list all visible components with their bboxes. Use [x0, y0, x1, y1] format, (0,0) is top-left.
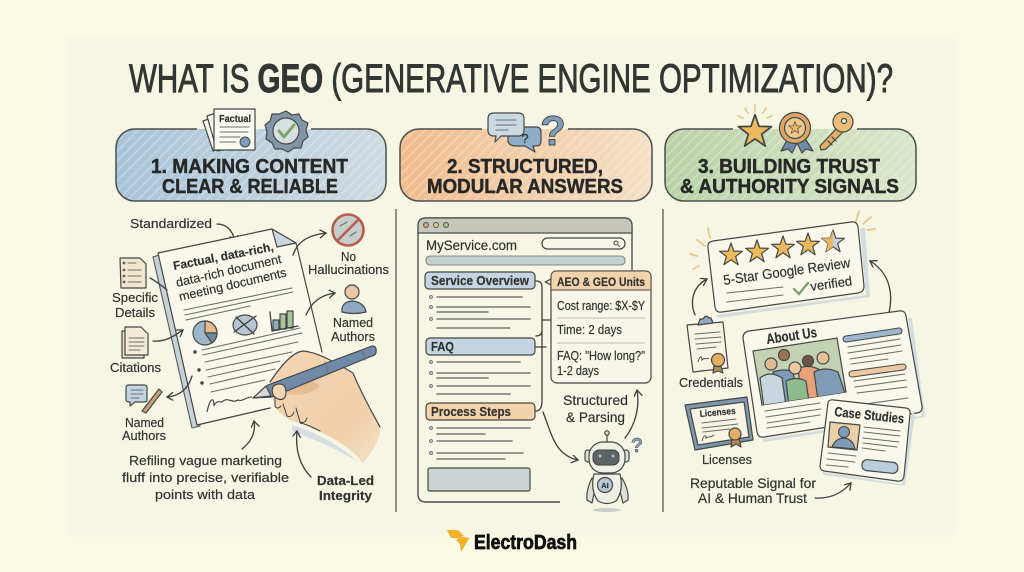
address text: MyService.com [426, 237, 517, 253]
panel: making content clear and reliable [110, 109, 389, 503]
icon: question speech bubbles: ? [540, 107, 566, 154]
label: data-led integrity [317, 473, 374, 503]
callout: aeo and geo units [545, 271, 651, 383]
icon: ai robot: AI [601, 481, 609, 490]
section header 3: & AUTHORITY SIGNALS [680, 176, 899, 198]
icon: question speech bubbles: ? [521, 131, 529, 146]
arrow: credentials to review card [692, 279, 707, 315]
icon: credentials clipboard [687, 316, 728, 373]
section: service overview: Service Overview [431, 274, 529, 288]
rating stars [720, 230, 844, 265]
label: structured and parsing [563, 392, 628, 425]
arrow: document to named authors [167, 376, 192, 397]
icon: key [820, 112, 853, 150]
logo: electrodash: ElectroDash [474, 532, 577, 554]
label: structured and parsing: & Parsing [566, 409, 625, 425]
icon: author person [342, 285, 366, 314]
callout: aeo and geo units: Time: 2 days [557, 323, 622, 337]
icon: lightning bolt [447, 530, 470, 552]
label: named authors right: Authors [331, 329, 375, 344]
document heading text: Factual, data-rich, [172, 240, 275, 273]
arrow: process steps to robot [543, 412, 578, 460]
arrow: citations to chart [153, 330, 183, 341]
icon: factual document [203, 109, 255, 151]
text: refiling note: Refiling vague marketing [129, 453, 282, 468]
label: named authors left: Authors [122, 428, 166, 443]
icon: specific details checklist [120, 258, 146, 288]
label: named authors left: Named [125, 415, 164, 430]
arrow: document to no hallucinations [293, 233, 326, 255]
arrow: refiling note to document [242, 421, 254, 449]
section header 3 [665, 129, 916, 201]
browser window [418, 218, 632, 502]
label: citations: Citations [110, 360, 162, 375]
logo: electrodash [447, 530, 577, 554]
label: specific details [112, 290, 158, 320]
arrow: about us to review card [870, 261, 891, 320]
label: no hallucinations: No [341, 249, 356, 264]
text: refiling note: points with data [155, 487, 256, 502]
text: reputable signal [690, 475, 816, 506]
signature [207, 397, 252, 412]
text: refiling note [122, 453, 289, 502]
label: specific details: Details [115, 305, 155, 320]
section header 1: CLEAR & RELIABLE [162, 176, 338, 198]
callout: aeo and geo units: Cost range: $X-$Y [557, 299, 646, 313]
section header 2: 2. STRUCTURED, [447, 156, 603, 178]
document heading text [172, 240, 288, 304]
pen [253, 346, 376, 398]
icon: gold star [738, 105, 772, 146]
panel: building trust and authority signals [665, 105, 925, 506]
case study portrait [828, 422, 860, 450]
arrow: data-led integrity to hand [297, 431, 311, 477]
label: no hallucinations: Hallucinations [308, 262, 389, 277]
section: process steps [426, 403, 535, 420]
text: reputable signal: Reputable Signal for [690, 475, 816, 491]
sparkles around review card [690, 211, 875, 269]
label: standardized: Standardized [130, 216, 212, 231]
card: 5-star google review: 5-Star Google Review [722, 254, 852, 288]
section header 2 [400, 129, 652, 201]
panel: structured modular answers [400, 107, 652, 512]
card: case studies: Case Studies [834, 404, 905, 426]
icon: license certificate [685, 397, 753, 450]
icon: ai robot: ? [631, 435, 643, 457]
card: case studies [820, 400, 915, 486]
document heading text: data-rich document [175, 252, 283, 290]
label: structured and parsing: Structured [563, 392, 628, 408]
icon: ai robot [585, 431, 643, 512]
section: faq [426, 338, 535, 355]
section header 3: 3. BUILDING TRUST [698, 156, 880, 178]
icon: citations document [122, 327, 148, 358]
arrow: standardized to document [217, 224, 235, 242]
label: credentials: Credentials [679, 375, 743, 390]
document illustration [153, 229, 322, 428]
label: specific details: Specific [112, 290, 158, 305]
label: licenses: Licenses [702, 452, 752, 467]
card: about us: About Us [765, 325, 818, 348]
card: 5-star google review: verified [809, 273, 853, 294]
section: faq: FAQ [431, 340, 454, 354]
window buttons [424, 222, 448, 228]
label: data-led integrity: Integrity [319, 488, 373, 503]
bar chart [270, 311, 298, 331]
callout: aeo and geo units: 1-2 days [557, 364, 599, 378]
pie chart [193, 321, 217, 345]
label: data-led integrity: Data-Led [317, 473, 374, 488]
section header 1 [116, 129, 386, 201]
icon: license certificate: Licenses [699, 406, 736, 420]
card: about us [743, 311, 925, 442]
callout: aeo and geo units: FAQ: "How long?" [557, 349, 645, 363]
icon: verified gear badge [265, 111, 308, 152]
text: refiling note: fluff into precise, verifiable [122, 470, 289, 485]
label: named authors right: Named [333, 315, 373, 330]
section: process steps: Process Steps [431, 405, 511, 419]
label: named authors left [122, 415, 166, 443]
callout: aeo and geo units: AEO & GEO Units [557, 275, 645, 289]
arrow: robot to callout [625, 390, 638, 438]
connector bracket [536, 281, 551, 411]
section header 1: 1. MAKING CONTENT [151, 156, 348, 178]
icon: comment and pencil [126, 385, 162, 413]
arrow: reputable signal to case studies [815, 483, 851, 498]
bullets [193, 350, 204, 385]
icon: award medal [780, 112, 813, 153]
text: reputable signal: AI & Human Trust [698, 490, 807, 506]
section header 2: MODULAR ANSWERS [427, 176, 623, 198]
arrow: document to named authors right [306, 293, 335, 315]
icon: question speech bubbles [488, 107, 566, 154]
label: named authors right [331, 315, 375, 344]
placeholder block [428, 468, 530, 491]
icon: no hallucinations sign [332, 214, 364, 246]
crossed-out circle [233, 315, 257, 335]
team photo [753, 338, 846, 408]
label: no hallucinations [308, 249, 389, 277]
card: 5-star google review [708, 222, 870, 318]
document heading text: meeting documents [178, 266, 288, 304]
icon: factual document: Factual [219, 113, 251, 125]
search box [542, 238, 625, 249]
people [760, 350, 846, 408]
illustration: hand writing with pen [253, 346, 380, 463]
